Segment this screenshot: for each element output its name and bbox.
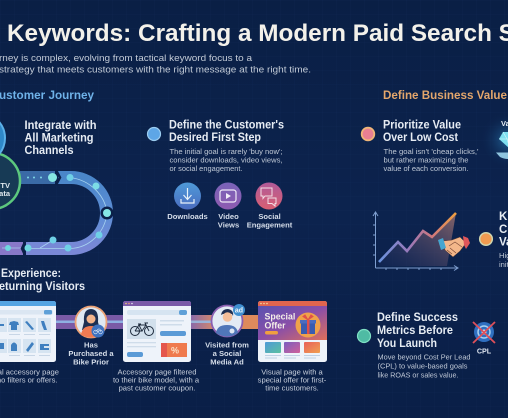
bullet: blue <box>148 128 160 140</box>
panel: integrate channels <box>0 113 114 255</box>
icon labels: Downloads <box>167 212 208 221</box>
label: a Social <box>213 349 241 358</box>
heading: know value <box>499 211 508 248</box>
chart axes <box>373 212 458 270</box>
panel: prioritize value <box>362 112 508 173</box>
persona: purchased prior <box>68 306 114 366</box>
panel: success metrics <box>358 312 495 380</box>
icon labels: Views <box>218 220 239 230</box>
offer text <box>264 312 295 330</box>
heading: first step <box>169 120 284 144</box>
body: success metrics: like ROAS or sales value. <box>378 370 458 380</box>
body: first step <box>170 147 282 173</box>
caption: special offer: Visual page with a <box>261 368 324 376</box>
icon: value diamond <box>480 112 508 168</box>
body: prioritize: but rather maximizing the <box>384 156 468 164</box>
label <box>68 340 114 366</box>
icon: handshake <box>438 236 470 257</box>
heading: customer journey: ustomer Journey <box>0 90 95 102</box>
heading: success metrics: Metrics Before <box>377 325 453 337</box>
body: success metrics <box>378 352 470 380</box>
offer text: Special <box>264 312 295 322</box>
icon labels: Engagement <box>247 220 293 230</box>
label: Media Ad <box>210 358 244 366</box>
icon labels <box>167 212 293 230</box>
chart area <box>379 213 456 266</box>
offer tiles <box>265 342 320 353</box>
heading: integrate: All Marketing <box>24 132 94 144</box>
heading: prioritize: Over Low Cost <box>383 132 458 144</box>
icon: video <box>214 182 242 210</box>
heading: experience: eturning Visitors <box>0 281 85 293</box>
card: general accessory page <box>0 301 56 362</box>
heading: success metrics: You Launch <box>377 338 437 350</box>
heading: first step: Define the Customer's <box>169 120 284 132</box>
avatar <box>76 306 106 338</box>
offer text: Offer <box>264 320 286 330</box>
heading: integrate: Channels <box>24 145 74 157</box>
panel: first step <box>148 120 293 230</box>
heading: prioritize <box>383 120 461 144</box>
icon labels: Video <box>218 212 239 221</box>
subtitle: strategy that meets customers with the right message at the right time. <box>0 64 311 74</box>
caption: special offer: time customers. <box>265 384 319 392</box>
subtitle: rney is complex, evolving from tactical keyword focus to a <box>0 52 253 63</box>
bike photo <box>127 319 156 339</box>
label: Has <box>84 340 98 350</box>
channel circle: tv data: TV <box>0 181 10 190</box>
body: first step: The initial goal is rarely 'buy now'; <box>170 147 282 156</box>
heading: success metrics: Define Success <box>377 312 458 324</box>
chart line <box>379 213 456 262</box>
panel: know customer value <box>480 211 508 269</box>
label: Bike Prior <box>73 358 109 366</box>
heading: first step: Desired First Step <box>169 132 261 144</box>
body: success metrics: (CPL) to value-based goals <box>378 362 468 370</box>
caption: special offer: special offer for first- <box>258 376 327 384</box>
channel circle: tv data <box>0 153 20 209</box>
heading: integrate: Integrate with <box>24 120 96 132</box>
persona: social media ad <box>205 304 249 366</box>
body: prioritize <box>384 147 479 173</box>
card: special offer page <box>258 301 327 362</box>
icon labels: Social <box>258 212 281 221</box>
caption: special offer <box>258 368 327 392</box>
channel circle: blue <box>0 113 5 163</box>
icon: downloads <box>174 182 201 210</box>
card: filtered accessory page <box>123 301 191 362</box>
icon: social <box>256 182 282 210</box>
bullet: orange <box>480 233 492 245</box>
caption: filtered page: to their bike model, with a <box>113 376 200 384</box>
body: first step: or social engagement. <box>170 164 242 173</box>
heading: integrate <box>24 120 96 157</box>
subtitle <box>0 52 311 74</box>
body: success metrics: Move beyond Cost Per Lead <box>378 352 470 362</box>
bullet: teal <box>358 330 370 342</box>
caption: general page <box>0 368 59 384</box>
caption: filtered page: past customer coupon. <box>119 384 195 392</box>
coupon: % <box>171 346 179 356</box>
heading: experience <box>0 268 85 293</box>
bullet: pink <box>362 128 374 140</box>
icon: crossed-out cpl: CPL <box>477 346 492 356</box>
body: prioritize: The goal isn't 'cheap clicks,' <box>384 147 479 156</box>
heading: define business value: Define Business Value <box>383 90 507 102</box>
avatar: ad <box>235 308 243 314</box>
label: Purchased a <box>68 349 114 358</box>
label: Visited from <box>205 340 249 350</box>
connector bands <box>56 315 260 329</box>
caption: filtered page: Accessory page filtered <box>118 368 196 376</box>
heading: prioritize: Prioritize Value <box>383 120 461 132</box>
body: prioritize: value of each conversion. <box>384 164 468 173</box>
heading: experience: Experience: <box>1 268 61 280</box>
journey track <box>0 170 114 255</box>
label <box>205 340 249 366</box>
icon: gift <box>296 312 320 338</box>
caption: filtered page <box>113 368 200 392</box>
body: first step: consider downloads, video views, <box>170 156 282 164</box>
heading: success metrics <box>377 312 458 350</box>
chart: value growth <box>373 212 470 270</box>
body: know value <box>499 251 508 269</box>
